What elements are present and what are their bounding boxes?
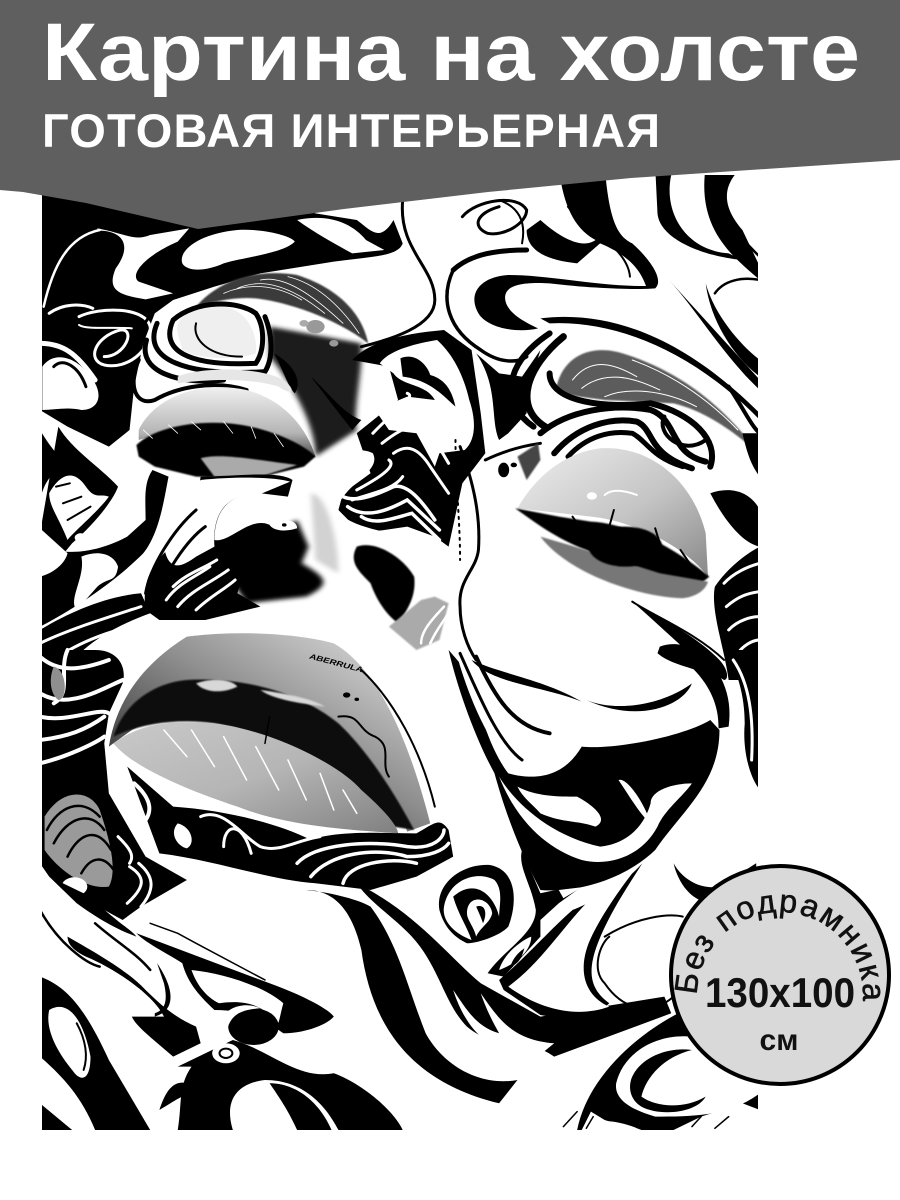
nose shading [233,450,449,650]
right side lines and black C shape [361,167,760,433]
grey header band [0,0,900,229]
curl ornament [439,850,586,977]
artwork: marbled black and white face [40,167,760,1130]
left white field with lines [40,423,171,630]
left eyebrow and hatch [196,273,368,347]
under lip swirl band [127,767,453,890]
mouth: ABERRULA [308,652,366,674]
title: Картина на холсте [42,7,860,98]
bottom left black bands [40,923,403,1130]
mouth [109,633,435,833]
right eyebrow [556,349,745,443]
curved label: Без подрамника [674,894,880,1002]
right edge masses [632,433,760,680]
lower left stripes before mouth [42,593,150,650]
top left black mass [42,195,403,447]
left socket rings [134,300,361,430]
diagonal black swaths [306,863,756,1103]
size: 130x100 [705,969,855,1016]
lower half of the painting [40,633,760,1130]
left marbled column [40,650,187,970]
left eye [136,370,315,478]
cheek black field under left eye [145,474,297,620]
subtitle: ГОТОВАЯ ИНТЕРЬЕРНАЯ [42,104,660,157]
center black blobs and flowing stripes [338,330,485,560]
lower right flowing mass [449,650,760,890]
right brow swirls [460,333,712,660]
upper half of the painting [40,167,760,680]
right eye [515,448,724,660]
white swirls in the top left [40,218,384,410]
dark socket and brow shadow [270,327,362,457]
left eddy rings [49,305,150,387]
size badge [669,864,891,1086]
ring under the badge [563,916,760,1130]
unit: см [760,1024,798,1057]
